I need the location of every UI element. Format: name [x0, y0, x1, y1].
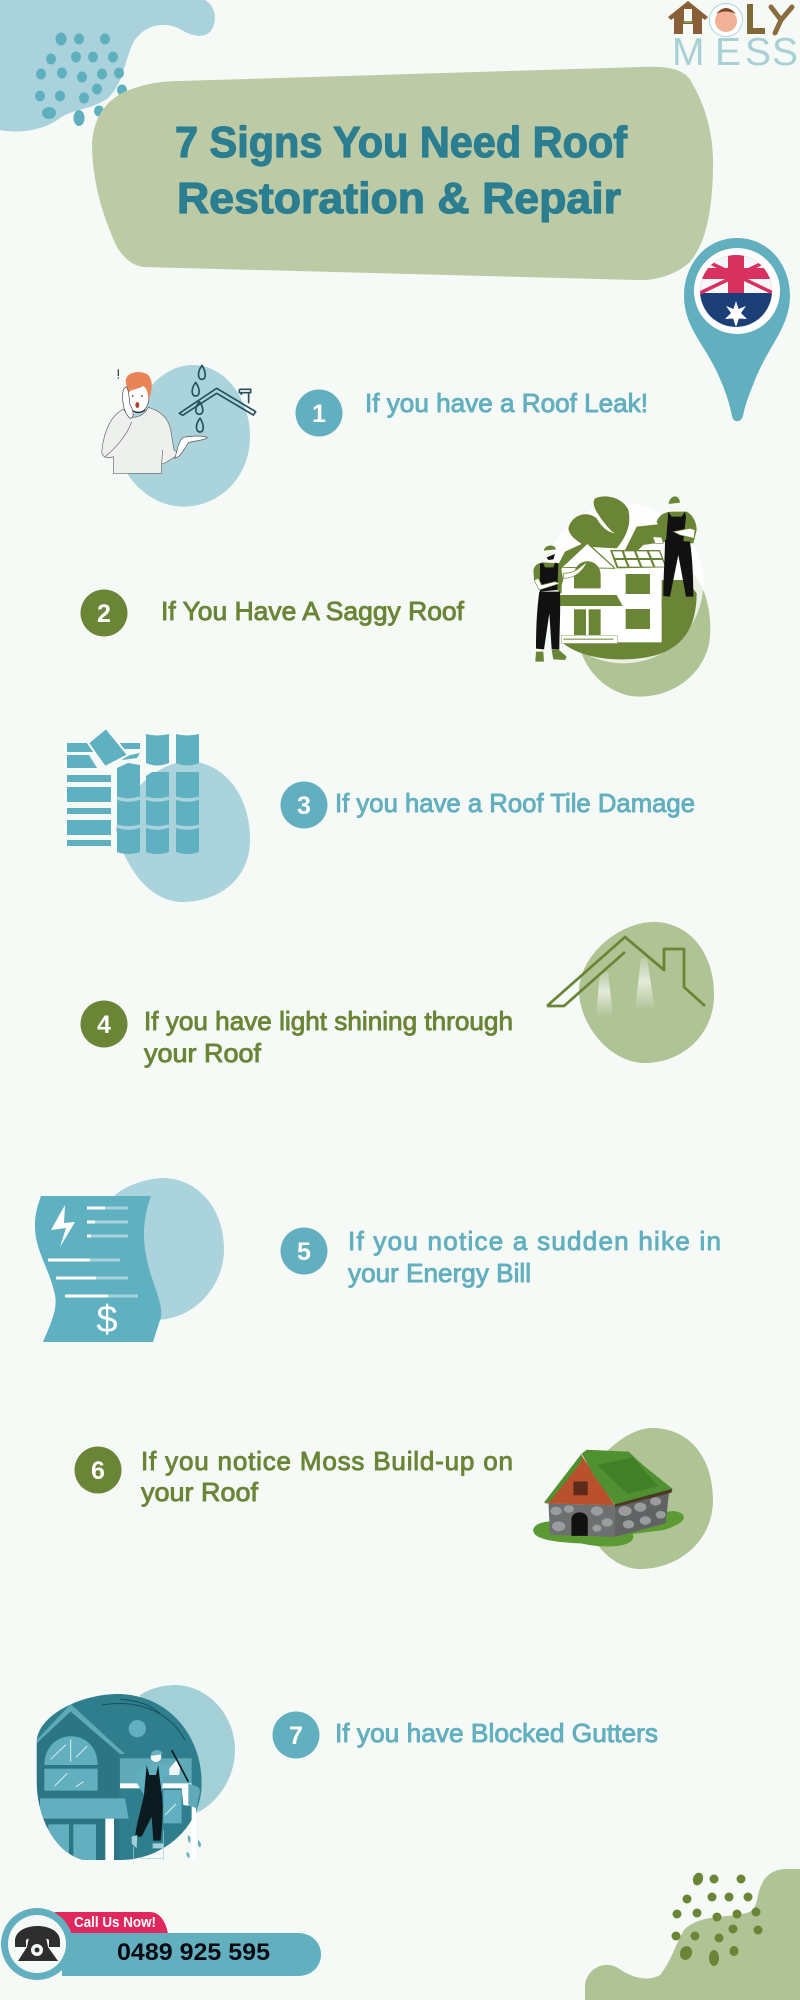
number badge 7: 7 — [289, 1722, 303, 1750]
call to action: phone — [1, 1908, 321, 1980]
number badge 1 — [296, 390, 342, 436]
number badge 7 — [272, 1712, 320, 1758]
icon: telephone — [1, 1908, 73, 1980]
illustration: light through roof — [547, 922, 714, 1063]
phone number bar: 0489 925 595 — [117, 1939, 270, 1966]
number badge 6 — [74, 1446, 122, 1494]
illustration: worker clearing gutters — [33, 1685, 235, 1863]
text: sign 2: If You Have A Saggy Roof — [161, 596, 465, 626]
illustration: damaged roof tiles — [67, 728, 250, 902]
number badge 1: 1 — [312, 400, 326, 428]
title text: 7 Signs You Need Roof — [175, 118, 627, 167]
illustration: energy bill: $ — [96, 1299, 118, 1341]
title text: Restoration & Repair — [177, 174, 621, 223]
text: sign 7: If you have Blocked Gutters — [335, 1718, 658, 1748]
number badge 3: 3 — [297, 792, 311, 820]
number badge 5: 5 — [297, 1238, 311, 1266]
decorative blob: top left — [0, 0, 215, 132]
worker right — [657, 512, 697, 543]
logo: Holy Mess: MESS — [672, 31, 798, 74]
panel: sign 4 — [80, 922, 714, 1068]
text: sign 6: If you notice Moss Build-up on — [141, 1446, 513, 1476]
tag: call us now — [55, 1912, 168, 1934]
text: sign 4: If you have light shining through — [144, 1006, 513, 1036]
logo: Holy Mess — [668, 1, 798, 74]
illustration: mossy stone house — [533, 1428, 713, 1569]
number badge 2: 2 — [97, 600, 111, 628]
panel: sign 7 — [33, 1685, 658, 1863]
panel: sign 2 — [80, 496, 710, 697]
title text — [175, 118, 627, 223]
number badge 5 — [280, 1228, 328, 1274]
number badge 4 — [80, 1000, 128, 1048]
number badge 3 — [280, 782, 328, 828]
text: sign 4: your Roof — [144, 1038, 262, 1068]
icon: Australia map pin — [684, 238, 790, 421]
text: sign 5: your Energy Bill — [348, 1258, 531, 1288]
text: sign 1: If you have a Roof Leak! — [365, 388, 648, 418]
number badge 6: 6 — [91, 1457, 105, 1485]
title banner — [92, 67, 713, 280]
text: sign 5: If you notice a sudden hike in — [348, 1226, 721, 1256]
number badge 4: 4 — [97, 1011, 111, 1039]
illustration: workers and house — [533, 496, 710, 697]
decorative blob: bottom right — [585, 1869, 800, 2000]
worker left — [533, 562, 563, 590]
panel: sign 3 — [67, 728, 695, 902]
tag: call us now: Call Us Now! — [74, 1915, 156, 1931]
text: sign 3: If you have a Roof Tile Damage — [335, 788, 695, 818]
number badge 2 — [80, 590, 128, 636]
panel: sign 5 — [35, 1178, 721, 1342]
text: sign 6: your Roof — [141, 1477, 259, 1507]
phone number bar — [62, 1933, 321, 1976]
panel: sign 6 — [74, 1428, 713, 1569]
illustration: energy bill — [35, 1178, 224, 1342]
panel: sign 1 — [102, 365, 648, 507]
illustration: worried person and roof leak — [102, 365, 256, 507]
